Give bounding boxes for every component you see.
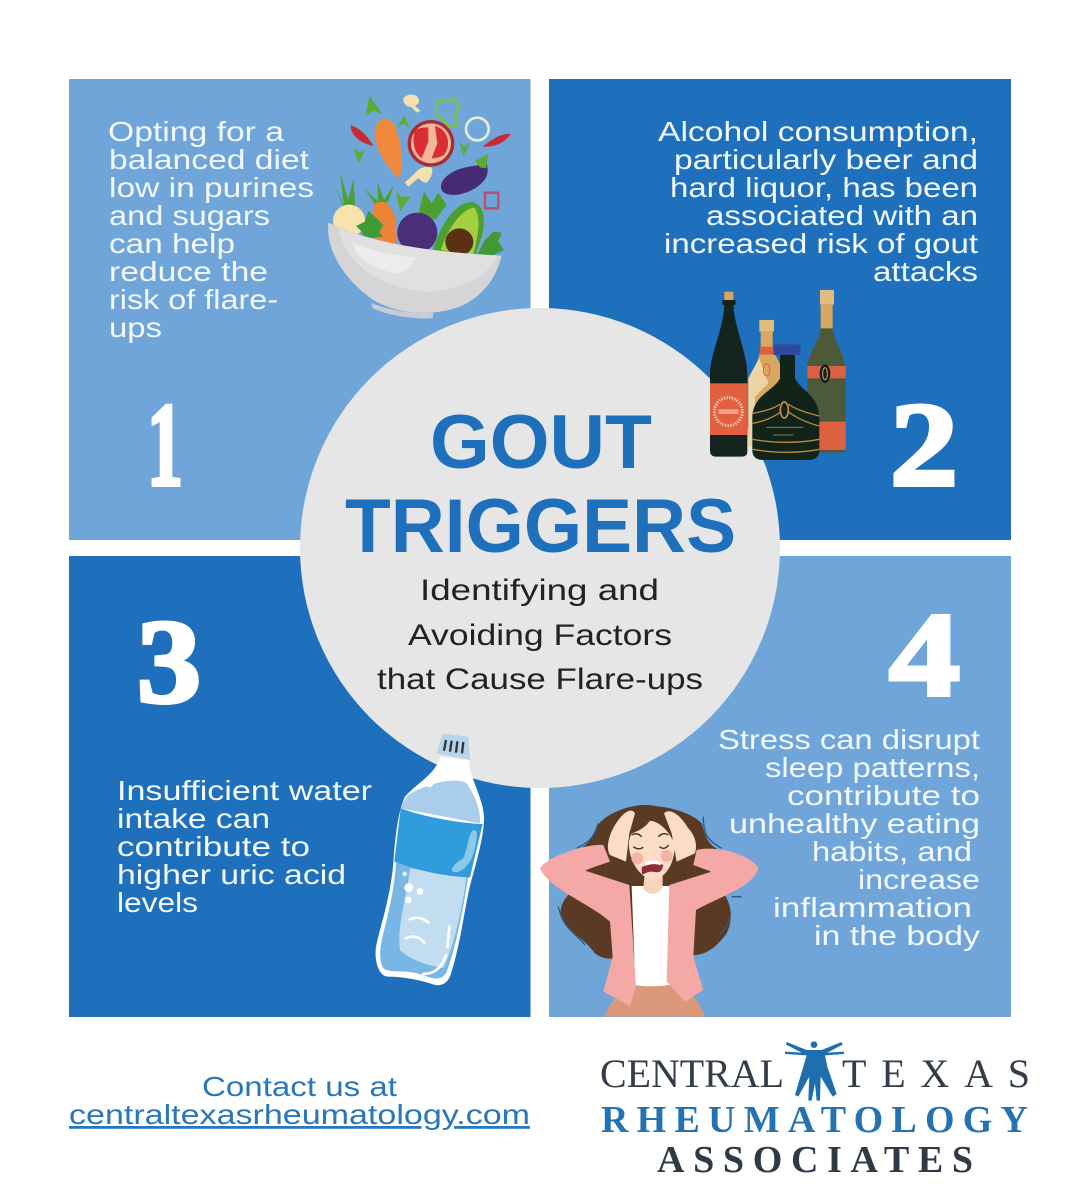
- panel 2 text: particularly beer and: [674, 144, 978, 175]
- title: [345, 400, 736, 569]
- panel 4 text: contribute to: [787, 780, 980, 811]
- panel 1 text: and sugars: [109, 200, 270, 231]
- middle tan bottle: [748, 320, 782, 447]
- panel 1: balanced diet: [69, 79, 530, 540]
- cardigan left: [540, 845, 636, 1006]
- skirt: [605, 981, 705, 1017]
- shirt: [632, 886, 675, 986]
- logo wordmark line 3: ASSOCIATES: [657, 1139, 973, 1181]
- panel 3 text: Insufficient water: [117, 775, 372, 806]
- contact text: [69, 1071, 530, 1130]
- panel 4 text: unhealthy eating: [729, 808, 980, 839]
- number 2: 2: [890, 378, 958, 511]
- hair: [561, 805, 731, 959]
- panel 3 text: intake can: [117, 803, 270, 834]
- panel 4 text: habits, and: [812, 836, 972, 867]
- panel 1 text: can help: [109, 228, 235, 259]
- right green bottle: [807, 290, 846, 453]
- panel 4: stress: [549, 556, 1011, 1017]
- cardigan right: [667, 849, 758, 1002]
- panel 3 text: [117, 775, 372, 918]
- logo: Central Texas Rheumatology Associates: [600, 1041, 1030, 1181]
- panel 1 text: low in purines: [109, 172, 314, 203]
- logo wordmark line 1: CENTRAL: [600, 1051, 784, 1096]
- panel 3: water: [69, 556, 530, 1017]
- panel 1 text: balanced diet: [109, 144, 309, 175]
- logo wordmark line 1: TEXAS: [842, 1051, 1030, 1096]
- icon: salad bowl with vegetables: [328, 94, 511, 318]
- panel 2: alcohol: [549, 79, 1011, 540]
- panel 2 text: Alcohol consumption,: [658, 116, 978, 147]
- panel 4 text: Stress can disrupt: [718, 724, 980, 755]
- panel 4 text: [718, 724, 980, 951]
- panel 1 text: reduce the: [109, 256, 268, 287]
- panel 3 text: contribute to: [117, 831, 310, 862]
- title: TRIGGERS: [345, 484, 736, 569]
- panel 1 text: [108, 116, 314, 343]
- logo icon: human figure: [785, 1041, 844, 1101]
- panel 4 text: increase: [858, 864, 980, 895]
- panel 4 text: inflammation: [773, 892, 972, 923]
- logo wordmark line 2: RHEUMATOLOGY: [601, 1099, 1028, 1141]
- front flask: [752, 344, 819, 460]
- panel 2 text: hard liquor, has been: [670, 172, 978, 203]
- panel 2 text: attacks: [873, 256, 978, 287]
- subtitle: Identifying and: [420, 574, 659, 607]
- panel 1 text: risk of flare-: [109, 284, 278, 315]
- panel 4 text: in the body: [814, 920, 980, 951]
- central circle with title: [300, 308, 780, 788]
- icon: water bottle: [376, 733, 484, 985]
- subtitle: Avoiding Factors: [408, 619, 672, 652]
- subtitle: that Cause Flare-ups: [377, 663, 703, 696]
- logo wordmark line 1: [600, 1051, 1030, 1096]
- panel 2 text: increased risk of gout: [664, 228, 978, 259]
- face: [629, 821, 675, 880]
- panel 3 text: higher uric acid: [117, 859, 346, 890]
- hands: [608, 811, 635, 862]
- number 4: 4: [889, 588, 960, 721]
- contact text: centraltexasrheumatology.com: [69, 1099, 530, 1130]
- contact text: Contact us at: [202, 1071, 397, 1102]
- icon: stressed woman: [540, 805, 758, 1017]
- number 3: 3: [137, 595, 201, 728]
- panel 2 text: associated with an: [706, 200, 978, 231]
- icon: alcohol bottles: [710, 290, 846, 460]
- panel 1 text: ups: [109, 312, 162, 343]
- panel 4 text: sleep patterns,: [765, 752, 980, 783]
- number 1: 1: [147, 378, 183, 511]
- panel 1 text: Opting for a: [108, 116, 285, 147]
- panel 3 text: levels: [117, 887, 198, 918]
- title: GOUT: [430, 400, 652, 485]
- panel 2 text: [658, 116, 978, 287]
- subtitle: [377, 574, 703, 696]
- left dark bottle: [710, 292, 748, 457]
